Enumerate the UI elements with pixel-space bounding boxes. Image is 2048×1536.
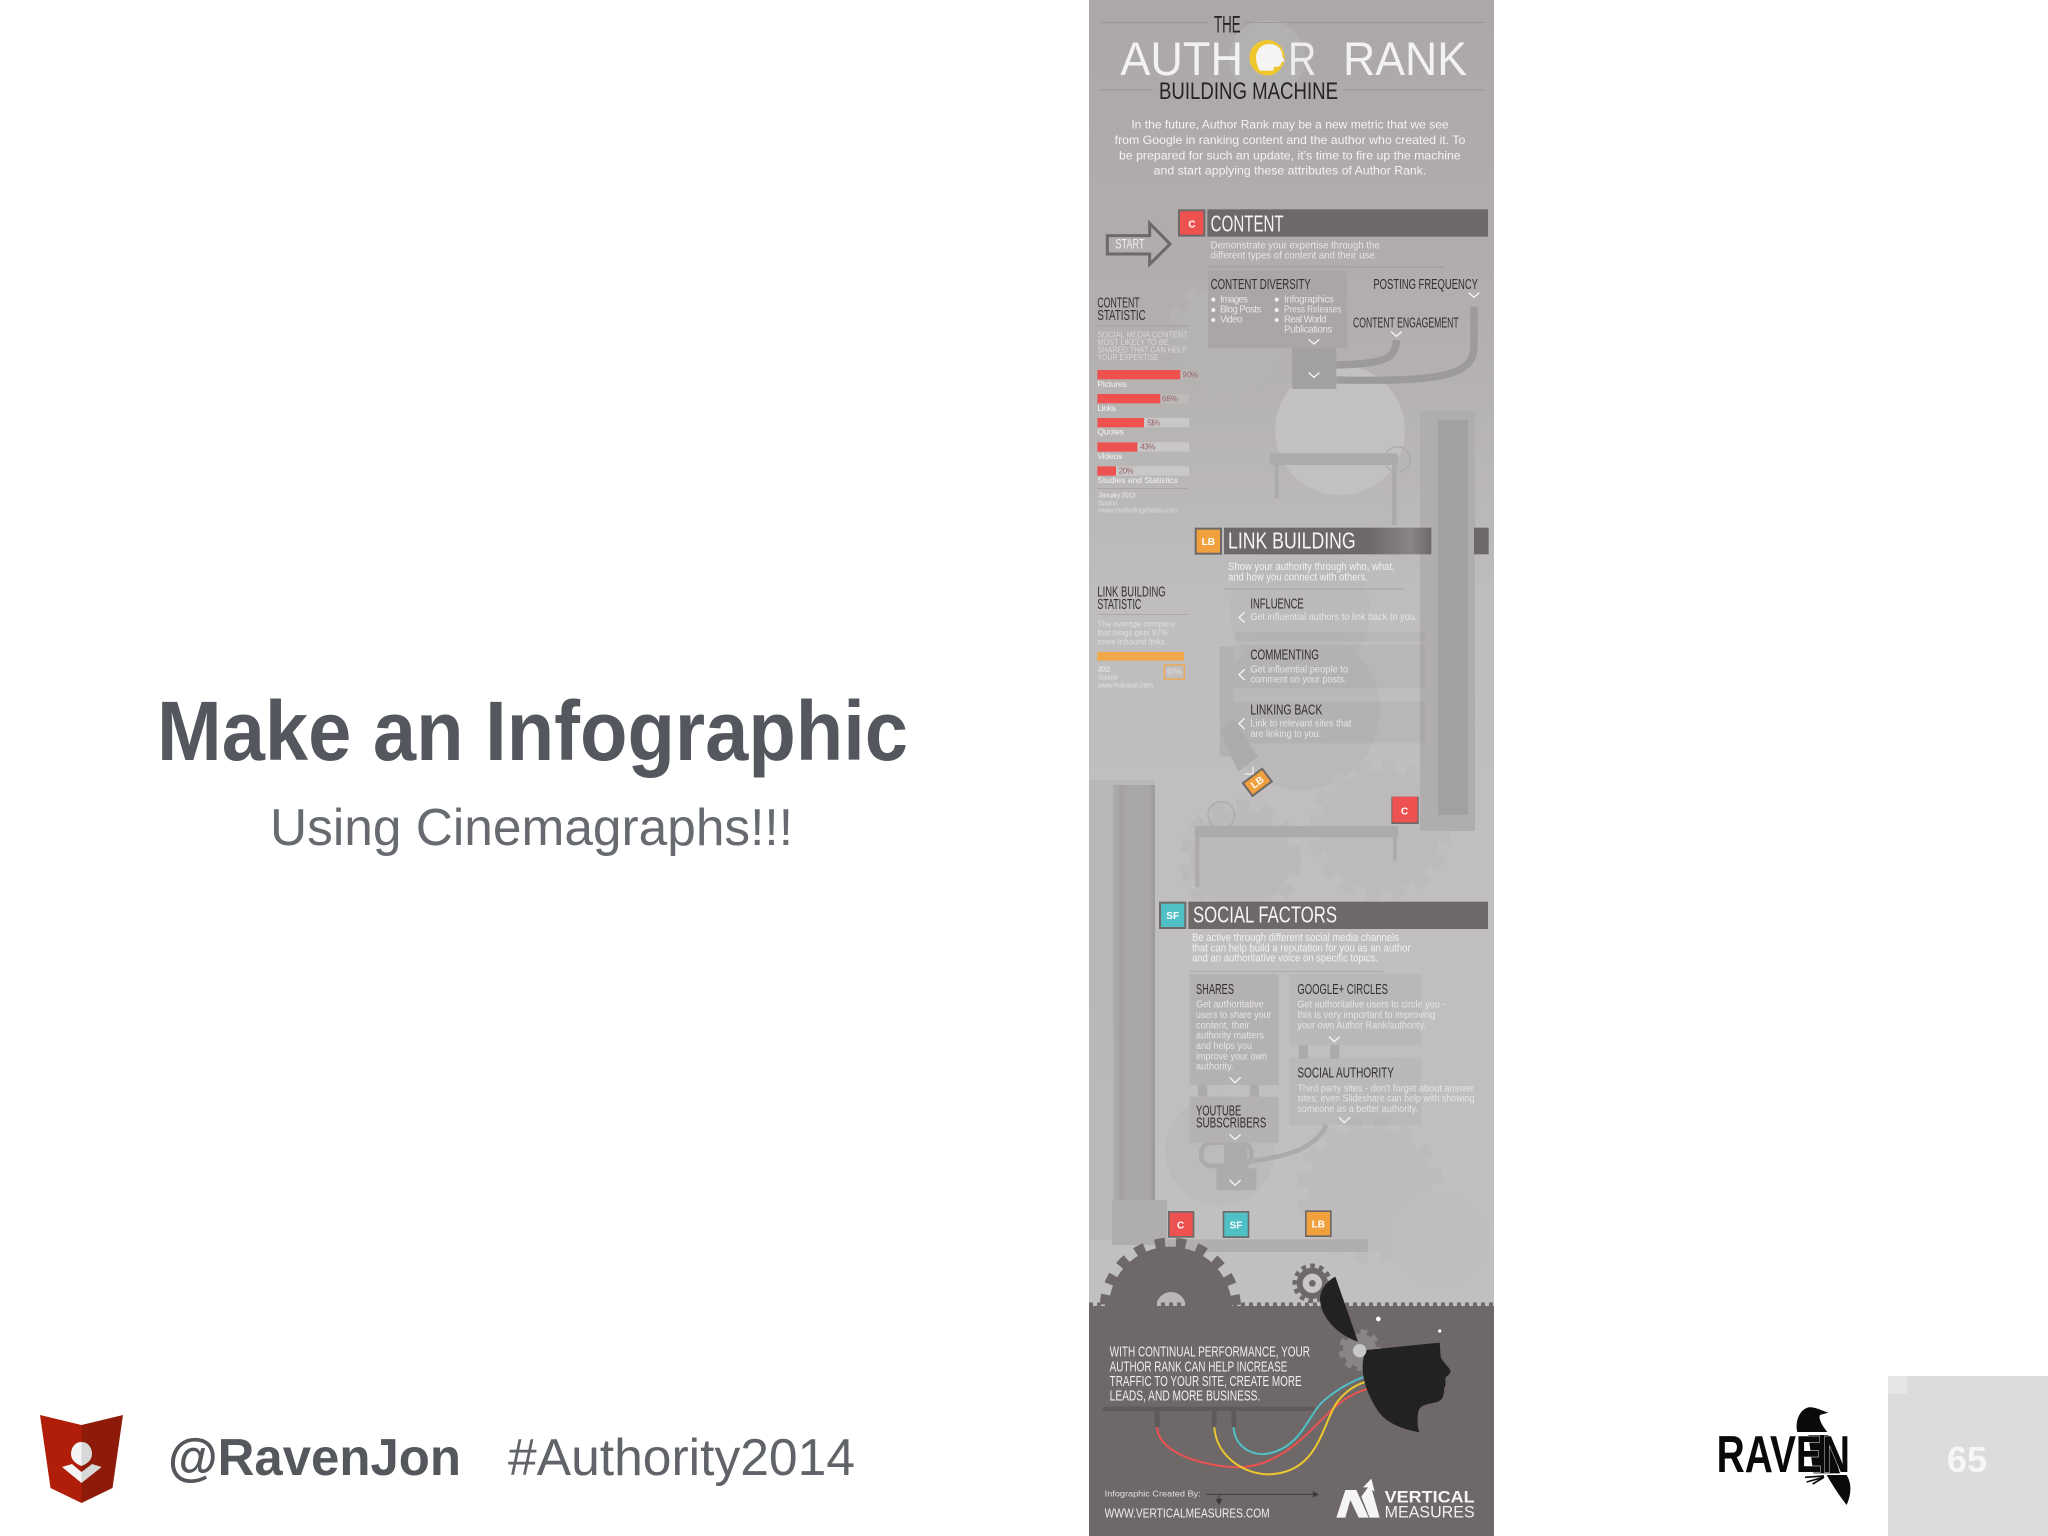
intro paragraph: from Google in ranking content and the author who created it. To bbox=[1115, 134, 1465, 147]
content description: different types of content and their use. bbox=[1211, 251, 1377, 262]
heading: author rank: AUTH bbox=[1120, 32, 1243, 85]
block: google plus circles: GOOGLE+ CIRCLES bbox=[1297, 982, 1388, 998]
header bar: social factors: SOCIAL FACTORS bbox=[1193, 902, 1337, 928]
slide subtitle: Using Cinemagraphs!!! bbox=[270, 799, 793, 857]
block: youtube subscribers: SUBSCRIBERS bbox=[1196, 1116, 1266, 1132]
coloured wires bbox=[1157, 1377, 1370, 1474]
link building source bbox=[1097, 667, 1153, 689]
conclusion text: TRAFFIC TO YOUR SITE, CREATE MORE bbox=[1110, 1374, 1302, 1390]
content statistic bars continued: 51% bbox=[1147, 418, 1160, 427]
block: social authority: sites; even Slideshare can help with showing bbox=[1297, 1094, 1475, 1105]
link building statistic description bbox=[1097, 619, 1176, 647]
badge: 97 percent bbox=[1164, 665, 1184, 679]
block: social authority bbox=[1290, 1057, 1475, 1125]
block: influence bbox=[1235, 596, 1425, 642]
output block: social factors bbox=[1216, 1168, 1256, 1190]
intro paragraph: In the future, Author Rank may be a new metric that we see bbox=[1131, 119, 1449, 132]
content statistic description: MOST LIKELY TO BE bbox=[1097, 338, 1169, 347]
slide title: Make an Infographic bbox=[157, 684, 908, 778]
block: linking back: LINKING BACK bbox=[1250, 703, 1322, 719]
panel background bbox=[1089, 0, 1494, 1536]
content statistic heading: CONTENT bbox=[1097, 296, 1140, 312]
content statistic source: www.marketingcharts.com bbox=[1097, 506, 1177, 515]
vertical measures logo: VERTICAL bbox=[1385, 1488, 1475, 1507]
bar: links (top): 68% bbox=[1162, 394, 1178, 403]
link building statistic heading: LINK BUILDING bbox=[1097, 585, 1166, 601]
hashtag: #Authority2014 bbox=[508, 1429, 855, 1487]
content description: Demonstrate your expertise through the bbox=[1211, 241, 1380, 252]
content statistic source: Source: bbox=[1098, 498, 1119, 507]
heading: author rank bbox=[1120, 32, 1467, 85]
block: commenting bbox=[1234, 645, 1425, 688]
link building description: Show your authority through who, what, bbox=[1228, 561, 1395, 573]
block: commenting: COMMENTING bbox=[1250, 648, 1319, 664]
section 4: footer bbox=[1089, 1210, 1494, 1536]
conclusion text: AUTHOR RANK CAN HELP INCREASE bbox=[1110, 1359, 1287, 1375]
badge: 97 percent: 97% bbox=[1167, 668, 1182, 677]
link building statistic description: that blogs gets 97% bbox=[1097, 627, 1169, 637]
icon: small gear bbox=[1295, 1266, 1330, 1301]
block: content diversity: Publications bbox=[1284, 325, 1333, 336]
bar: links (top) bbox=[1097, 394, 1189, 403]
tall columns bbox=[1112, 411, 1475, 1245]
link building source: Source: bbox=[1098, 674, 1119, 681]
section 3: social factors bbox=[1159, 797, 1488, 1190]
bar: 97 percent bbox=[1097, 652, 1184, 661]
block: google plus circles: this is very important to improving bbox=[1297, 1010, 1435, 1021]
link building statistic heading: STATISTIC bbox=[1097, 597, 1142, 613]
content statistic heading: STATISTIC bbox=[1097, 308, 1146, 324]
header bar: social factors bbox=[1188, 902, 1488, 929]
block: youtube subscribers bbox=[1190, 1097, 1279, 1143]
block: shares: authority matters bbox=[1196, 1031, 1264, 1042]
block: shares: SHARES bbox=[1196, 982, 1234, 998]
block: influence: Get influential authors to link back to you. bbox=[1250, 612, 1417, 623]
content statistic source bbox=[1097, 491, 1177, 515]
page number box: 65 bbox=[1947, 1439, 1987, 1480]
block: shares: authority. bbox=[1196, 1062, 1234, 1073]
machine rail bbox=[1155, 1239, 1368, 1252]
content statistic bars continued: Quotes bbox=[1097, 427, 1125, 437]
header bar: link building: LINK BUILDING bbox=[1228, 527, 1356, 553]
page number box bbox=[1888, 1376, 2048, 1536]
output block: content diversity bbox=[1292, 348, 1336, 389]
header bar: content: CONTENT bbox=[1211, 210, 1284, 236]
section 2: link building bbox=[1097, 403, 1489, 796]
wire rail bbox=[1103, 1407, 1315, 1427]
block: content diversity: Images bbox=[1220, 294, 1248, 305]
pipes bbox=[1336, 307, 1474, 380]
heading: author rank: O bbox=[1253, 32, 1283, 85]
social factors description: Be active through different social media channels bbox=[1192, 932, 1399, 944]
block: social authority: SOCIAL AUTHORITY bbox=[1297, 1066, 1394, 1082]
content description bbox=[1211, 241, 1380, 262]
heading: building machine: BUILDING MACHINE bbox=[1159, 78, 1338, 105]
block: shares bbox=[1190, 974, 1279, 1085]
block: content diversity: CONTENT DIVERSITY bbox=[1211, 277, 1311, 293]
conclusion text bbox=[1110, 1345, 1310, 1404]
block: google plus circles bbox=[1290, 974, 1445, 1045]
raven logo bbox=[1717, 1407, 1850, 1505]
content statistic description: SHARED THAT CAN HELP bbox=[1097, 345, 1187, 354]
content statistic bars continued: Links bbox=[1097, 403, 1117, 413]
content statistic heading bbox=[1097, 296, 1146, 324]
link building description: and how you connect with others. bbox=[1228, 571, 1368, 583]
block: content diversity: Blog Posts bbox=[1220, 304, 1262, 315]
block: influence: INFLUENCE bbox=[1250, 596, 1304, 612]
social factors description bbox=[1192, 932, 1411, 965]
block: commenting: Get influential people to bbox=[1250, 664, 1348, 675]
machine crossbar bbox=[1220, 447, 1410, 757]
header bar: content bbox=[1207, 209, 1488, 237]
block: content diversity bbox=[1208, 271, 1347, 348]
block: shares: improve your own bbox=[1196, 1051, 1267, 1062]
badge: social factors token bbox=[1223, 1211, 1249, 1238]
badge: content token: C bbox=[1401, 807, 1408, 818]
bar: pictures bbox=[1097, 370, 1198, 389]
link building statistic heading bbox=[1097, 585, 1166, 613]
link building statistic description: The average company bbox=[1097, 619, 1176, 629]
block: linking back: are linking to you. bbox=[1250, 729, 1321, 740]
twitter handle: @RavenJon bbox=[168, 1429, 461, 1487]
infographic panel bbox=[1089, 0, 1494, 1536]
conclusion text: LEADS, AND MORE BUSINESS. bbox=[1110, 1388, 1260, 1404]
heading: author rank: RANK bbox=[1343, 32, 1467, 85]
badge: content: C bbox=[1188, 219, 1196, 230]
badge: content token: C bbox=[1177, 1220, 1184, 1231]
block: shares: Get authoritative bbox=[1196, 1000, 1264, 1011]
credit url: WWW.VERTICALMEASURES.COM bbox=[1105, 1506, 1270, 1521]
badge: link building token bbox=[1305, 1210, 1332, 1237]
block: youtube subscribers: YOUTUBE bbox=[1196, 1104, 1241, 1120]
content statistic bars continued: 43% bbox=[1140, 443, 1155, 452]
badge: social factors: SF bbox=[1166, 911, 1179, 922]
label: posting frequency: POSTING FREQUENCY bbox=[1373, 277, 1478, 293]
content statistic description bbox=[1097, 330, 1188, 362]
icon: large gear bbox=[1105, 1243, 1236, 1374]
block: shares: content, their bbox=[1196, 1020, 1250, 1031]
badge: link building bbox=[1195, 528, 1222, 555]
content statistic description: SOCIAL MEDIA CONTENT bbox=[1097, 330, 1188, 339]
content statistic bars continued: Videos bbox=[1097, 451, 1123, 461]
badge: content bbox=[1178, 209, 1205, 237]
intro paragraph bbox=[1115, 119, 1465, 177]
machine crossbar bbox=[1195, 802, 1398, 1168]
badge: content token bbox=[1168, 1211, 1194, 1238]
label: content engagement bbox=[1353, 316, 1459, 336]
social factors description: that can help build a reputation for you as an author bbox=[1192, 942, 1411, 954]
conclusion text: WITH CONTINUAL PERFORMANCE, YOUR bbox=[1110, 1345, 1310, 1361]
link building description bbox=[1228, 561, 1395, 583]
bar: pictures: 90% bbox=[1182, 370, 1198, 379]
block: content diversity: Real World bbox=[1284, 315, 1326, 326]
content statistic bars continued: Studies and Statistics bbox=[1097, 475, 1179, 485]
intro paragraph: be prepared for such an update, it’s time to fire up the machine bbox=[1119, 149, 1461, 162]
credit arrows bbox=[1206, 1492, 1318, 1504]
block: shares: users to share your bbox=[1196, 1010, 1272, 1021]
content statistic description: YOUR EXPERTISE bbox=[1097, 353, 1159, 362]
icon: red shield logo bbox=[40, 1415, 123, 1503]
badge: social factors token: SF bbox=[1230, 1220, 1242, 1231]
badge: link building token: LB bbox=[1312, 1219, 1325, 1230]
block: linking back: Link to relevant sites that bbox=[1250, 719, 1352, 730]
vertical measures logo bbox=[1336, 1479, 1475, 1521]
title rules bbox=[1100, 22, 1485, 90]
intro paragraph: and start applying these attributes of Author Rank. bbox=[1154, 164, 1426, 177]
block: google plus circles: your own Author Rank/authority. bbox=[1297, 1020, 1426, 1031]
header bar stub bbox=[1474, 528, 1489, 554]
content statistic bars continued bbox=[1097, 403, 1189, 485]
content statistic source: January 2013 bbox=[1098, 491, 1136, 500]
raven logo: RAVEN bbox=[1717, 1425, 1850, 1483]
chute and tilted orange token: LB bbox=[1249, 775, 1266, 791]
block: content diversity: Infographics bbox=[1284, 294, 1334, 305]
block: commenting: comment on your posts. bbox=[1250, 675, 1346, 686]
label: content engagement: CONTENT ENGAGEMENT bbox=[1353, 316, 1459, 332]
chute and tilted orange token bbox=[1220, 718, 1272, 796]
badge: content token bbox=[1391, 797, 1419, 824]
block: content diversity: Video bbox=[1220, 315, 1242, 326]
vertical measures logo: MEASURES bbox=[1385, 1502, 1475, 1521]
block: content diversity: Press Releases bbox=[1284, 304, 1341, 315]
block: social authority: Third party sites - don't forget about answer bbox=[1297, 1083, 1475, 1094]
section 1: title and content bbox=[1097, 11, 1488, 403]
block: shares: and helps you bbox=[1196, 1041, 1252, 1052]
start arrow bbox=[1107, 223, 1170, 264]
link building source: www.hubspot.com bbox=[1097, 682, 1153, 689]
bar: pictures: Pictures bbox=[1097, 379, 1128, 389]
social factors description: and an authoritative voice on specific topics. bbox=[1192, 953, 1378, 965]
credit text: Infographic Created By: bbox=[1105, 1489, 1201, 1499]
footer background bbox=[1089, 1304, 1494, 1536]
label: posting frequency bbox=[1373, 277, 1479, 297]
content statistic bars continued: 20% bbox=[1119, 467, 1134, 476]
heading: author rank: R bbox=[1288, 32, 1316, 85]
icon: head with open top bbox=[1320, 1277, 1451, 1432]
heading: the: THE bbox=[1214, 11, 1241, 38]
start arrow: START bbox=[1115, 236, 1145, 252]
badge: social factors bbox=[1159, 902, 1186, 929]
block: linking back bbox=[1234, 702, 1425, 743]
block: google plus circles: Get authoritative users to circle you - bbox=[1297, 1000, 1445, 1011]
badge: link building: LB bbox=[1202, 537, 1215, 548]
link building source: 2012 bbox=[1098, 667, 1111, 674]
link building statistic description: more inbound links. bbox=[1097, 637, 1167, 647]
block: social authority: someone as a better authority. bbox=[1297, 1104, 1418, 1115]
machine background: gears and structure bbox=[1089, 20, 1490, 1290]
